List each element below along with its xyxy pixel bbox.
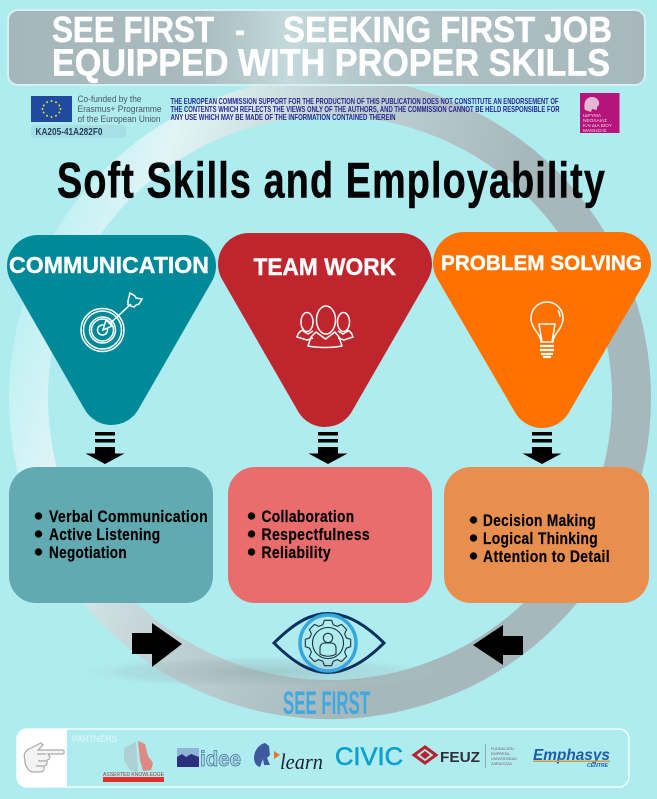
logo: emphasys: CENTRE bbox=[587, 763, 608, 769]
logo: learn: learn bbox=[280, 749, 323, 774]
logo: idee bbox=[177, 748, 241, 771]
background ring bbox=[9, 77, 651, 719]
Erasmus co-funding text: of the European Union bbox=[78, 114, 160, 125]
panel: partners bbox=[17, 729, 629, 787]
header banner bbox=[8, 9, 645, 85]
panel: team work skills: Respectfulness bbox=[262, 525, 370, 544]
panel: problem solving: PROBLEM SOLVING bbox=[441, 251, 642, 275]
partners label: PARTNERS bbox=[72, 734, 117, 744]
panel: team work skills bbox=[228, 467, 432, 603]
ring shadow bbox=[68, 655, 448, 689]
header banner: SEEKING FIRST JOB bbox=[283, 9, 612, 50]
logo: asserted knowledge: ASSERTED KNOWLEDGE bbox=[103, 772, 165, 778]
logo: feuz bbox=[414, 744, 517, 768]
panel: problem solving skills bbox=[444, 467, 649, 603]
Erasmus co-funding text: Co-funded by the bbox=[78, 94, 142, 105]
icon: youth foundation logo: ΚΑΙ ΔΙΑ ΒΙΟΥ bbox=[583, 123, 613, 129]
Erasmus co-funding text: Erasmus+ Programme bbox=[78, 104, 162, 115]
arrow: left pointing right bbox=[132, 623, 182, 667]
icon: target with arrow bbox=[81, 293, 142, 352]
logo: asserted knowledge bbox=[103, 741, 165, 782]
panel: communication skills: Active Listening bbox=[49, 525, 160, 544]
panel: communication skills bbox=[9, 467, 213, 603]
panel: team work skills: Reliability bbox=[262, 543, 331, 562]
panel: team work skills: Collaboration bbox=[262, 507, 354, 526]
icon: youth foundation logo: ΝΕΟΛΑΙΑΣ bbox=[583, 118, 607, 124]
disclaimer text bbox=[170, 96, 560, 122]
logo: learn bbox=[254, 743, 323, 774]
logo: feuz: ZARAGOZA bbox=[491, 762, 512, 766]
panel: team work bbox=[249, 254, 401, 396]
icon: group of people bbox=[297, 306, 353, 348]
logo: civic: CIVIC bbox=[335, 743, 403, 771]
header banner: SEE FIRST bbox=[52, 9, 214, 50]
header banner: EQUIPPED WITH PROPER SKILLS bbox=[52, 42, 610, 84]
disclaimer text: ANY USE WHICH MAY BE MADE OF THE INFORMATION CONTAINED THEREIN bbox=[170, 112, 396, 122]
icon: light bulb bbox=[531, 302, 563, 357]
logo: feuz: FEUZ bbox=[440, 750, 480, 766]
arrow: problem solving down bbox=[522, 432, 562, 464]
logo: feuz: FUNDACIÓN bbox=[491, 746, 514, 751]
panel: problem solving skills: Decision Making bbox=[483, 511, 596, 530]
logo: idee: idee bbox=[200, 748, 241, 771]
logo: emphasys: Emphasys bbox=[533, 747, 610, 764]
panel: problem solving skills: Attention to Detail bbox=[483, 547, 610, 566]
logo: feuz: EMPRESA bbox=[491, 752, 510, 756]
panel: communication: COMMUNICATION bbox=[9, 252, 209, 278]
project code: KA205-41A282F0 bbox=[36, 127, 103, 138]
icon: youth foundation logo: ΜΑΘΗΣΗΣ bbox=[583, 128, 607, 134]
panel: communication bbox=[9, 252, 209, 394]
logo: feuz: UNIVERSIDAD bbox=[491, 757, 517, 761]
arrow: communication down bbox=[86, 432, 124, 464]
panel: communication skills: Verbal Communication bbox=[49, 507, 208, 526]
icon: eye with gear bbox=[274, 614, 384, 672]
icon: youth foundation logo bbox=[580, 93, 620, 134]
Erasmus co-funding text bbox=[78, 94, 162, 125]
icon: youth foundation logo: ΙΔΡΥΜΑ bbox=[583, 113, 602, 119]
panel: problem solving skills: Logical Thinking bbox=[483, 529, 598, 548]
icon: pointing hand bbox=[24, 743, 64, 772]
panel: problem solving bbox=[441, 251, 642, 397]
arrow: team work down bbox=[308, 432, 348, 464]
header banner: - bbox=[235, 9, 245, 50]
panel: team work: TEAM WORK bbox=[254, 254, 396, 281]
brand label: SEE FIRST bbox=[283, 685, 370, 721]
panel: communication skills: Negotiation bbox=[49, 543, 127, 562]
arrow: right pointing left bbox=[473, 625, 523, 665]
icon: EU flag bbox=[31, 96, 72, 122]
